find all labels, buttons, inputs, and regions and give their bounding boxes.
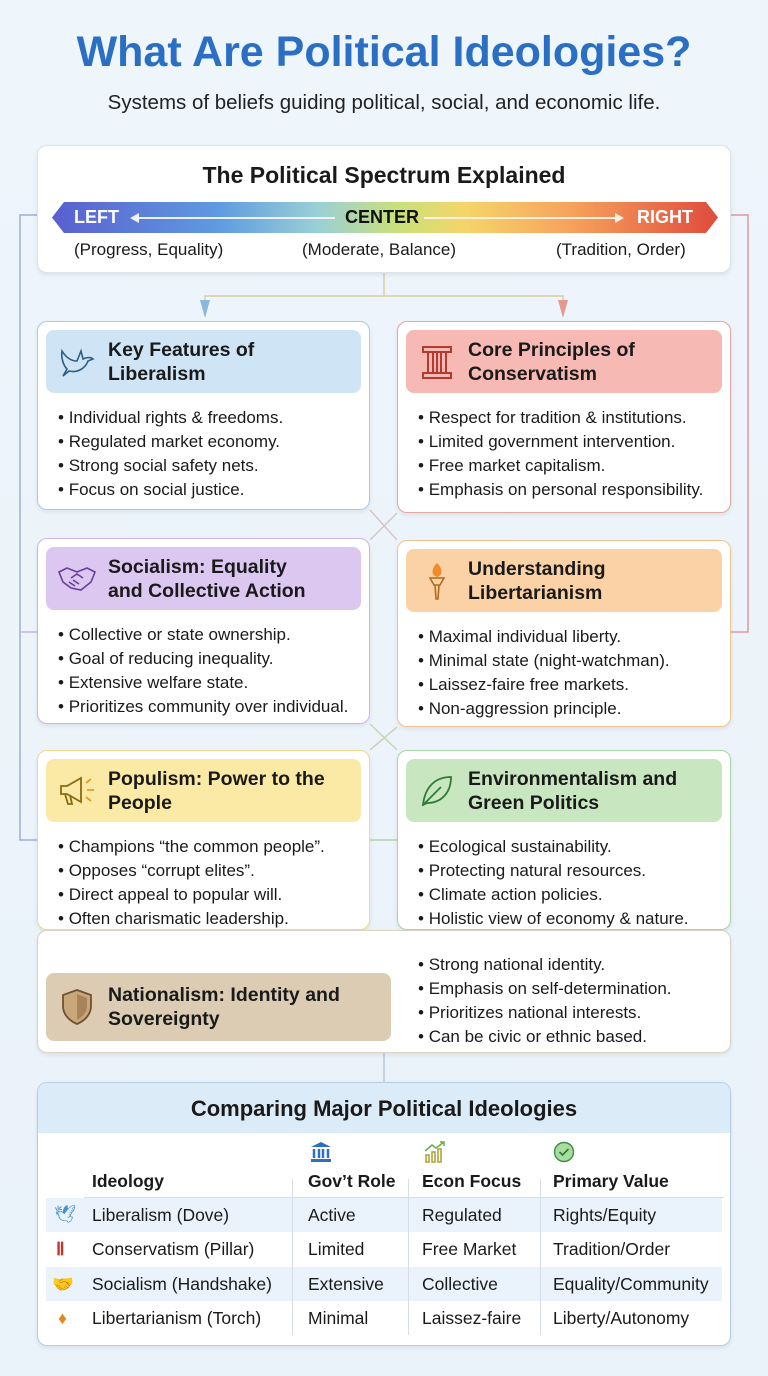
header: libertarianism: Libertarianism [468,582,602,604]
header: liberalism [46,330,361,393]
bullets: liberalism [58,408,283,499]
row: libertarianism: Minimal [308,1308,368,1328]
row: liberalism: Rights/Equity [553,1205,656,1225]
row: liberalism: Active [308,1205,356,1225]
bullets: environmentalism: Holistic view of economy & nature. [429,909,689,928]
row: liberalism: 🕊 [54,1204,76,1224]
row: conservatism [56,1239,670,1259]
header: libertarianism [406,549,722,612]
table heading [38,1083,730,1133]
bullets: conservatism: Free market capitalism. [429,456,605,475]
bullets: libertarianism [418,627,670,718]
bullets: libertarianism: Minimal state (night-watchman). [429,651,670,670]
spectrum heading: The Political Spectrum Explained [202,162,565,188]
row: socialism: 🤝 [52,1274,74,1294]
header: socialism: Socialism: Equality [108,556,287,578]
bullets: populism: Often charismatic leadership. [69,909,289,928]
row: liberalism: Liberalism (Dove) [92,1205,229,1225]
bullets: socialism: Extensive welfare state. [69,673,248,692]
panel: comparison table [37,1082,731,1346]
row: socialism: Collective [422,1274,498,1294]
header: liberalism: Liberalism [108,362,206,384]
row: liberalism [46,1198,722,1232]
spectrum bar: CENTER [345,207,419,227]
header: environmentalism: Environmentalism and [468,768,677,790]
spectrum labels: (Progress, Equality) [74,240,223,259]
row: socialism [46,1267,722,1301]
header: libertarianism: Understanding [468,558,606,580]
spectrum bar [52,202,718,233]
bullets: socialism: Prioritizes community over individual. [69,697,348,716]
bullets: libertarianism: Laissez-faire free markets. [429,675,629,694]
subtitle: Systems of beliefs guiding political, social, and economic life. [108,91,660,114]
row: conservatism: Limited [308,1239,364,1259]
header: populism [46,759,361,822]
panel: comparison table: Primary Value [553,1171,669,1191]
panel: socialism [37,538,370,724]
header: socialism: and Collective Action [108,580,306,602]
header: nationalism [46,973,391,1041]
row: conservatism: Tradition/Order [553,1239,670,1259]
bullets: environmentalism: Protecting natural resources. [429,861,646,880]
panel: environmentalism [397,750,731,930]
row: libertarianism: Libertarianism (Torch) [92,1308,261,1328]
panel: comparison table: Gov’t Role [308,1171,396,1191]
panel: spectrum: (Moderate, Balance) [302,240,456,259]
row: conservatism: Conservatism (Pillar) [92,1239,254,1259]
bullets: conservatism: Respect for tradition & institutions. [429,408,687,427]
bullets: conservatism: Emphasis on personal responsibility. [429,480,703,499]
header: nationalism: Sovereignty [108,1008,220,1030]
panel: comparison table: Econ Focus [422,1171,521,1191]
spectrum bar: RIGHT [637,207,693,227]
column headers: Ideology [92,1171,164,1191]
header: environmentalism [406,759,722,822]
row: libertarianism [58,1308,690,1328]
bullets: liberalism: Focus on social justice. [69,480,244,499]
bullets: liberalism: Regulated market economy. [69,432,280,451]
header: socialism [46,547,361,610]
row: conservatism: Free Market [422,1239,516,1259]
row: libertarianism: ♦ [58,1308,67,1328]
panel: conservatism [397,321,731,513]
spectrum bar: LEFT [74,207,119,227]
panel: populism [37,750,370,930]
bullets: conservatism [418,408,703,499]
bullets: socialism: Goal of reducing inequality. [69,649,273,668]
row: socialism: Extensive [308,1274,384,1294]
title: What Are Political Ideologies? [77,28,691,76]
panel: libertarianism [397,540,731,727]
bullets: nationalism: Strong national identity. [429,955,605,974]
row: libertarianism: Liberty/Autonomy [553,1308,689,1328]
bullets: nationalism: Prioritizes national interests. [429,1003,641,1022]
header: environmentalism: Green Politics [468,792,599,814]
header: conservatism [406,330,722,393]
panel: liberalism [37,321,370,510]
bullets: liberalism: Strong social safety nets. [69,456,259,475]
bullets: environmentalism: Ecological sustainability. [429,837,612,856]
row: conservatism: Ⅱ [56,1239,65,1259]
bullets: socialism: Collective or state ownership. [69,625,291,644]
bullets: nationalism: Can be civic or ethnic based. [429,1027,647,1046]
header: nationalism: Nationalism: Identity and [108,984,340,1006]
bullets: liberalism: Individual rights & freedoms. [69,408,283,427]
bullets: socialism [58,625,348,716]
bullets: libertarianism: Maximal individual liberty. [429,627,621,646]
bullets: environmentalism [418,837,689,928]
header: conservatism: Core Principles of [468,338,635,360]
panel: nationalism [37,930,731,1053]
row: socialism: Socialism (Handshake) [92,1274,272,1294]
bullets: environmentalism: Climate action policies. [429,885,603,904]
header: liberalism: Key Features of [108,338,254,360]
bullets: conservatism: Limited government intervention. [429,432,675,451]
row: libertarianism: Laissez-faire [422,1308,521,1328]
column icons [311,1142,331,1162]
bullets: populism: Direct appeal to popular will. [69,885,282,904]
panel: spectrum [37,145,731,273]
table heading: Comparing Major Political Ideologies [191,1096,577,1121]
bullets: populism: Opposes “corrupt elites”. [69,861,255,880]
header: populism: Populism: Power to the [108,768,325,790]
bullets: nationalism: Emphasis on self-determination. [429,979,672,998]
header: populism: People [108,792,172,814]
row: socialism: Equality/Community [553,1274,709,1294]
bullets: populism: Champions “the common people”. [69,837,325,856]
bullets: populism [58,837,325,928]
panel: spectrum: (Tradition, Order) [556,240,686,259]
bullets: nationalism [418,955,672,1046]
row: liberalism: Regulated [422,1205,502,1225]
header: conservatism: Conservatism [468,362,597,384]
bullets: libertarianism: Non-aggression principle. [429,699,621,718]
